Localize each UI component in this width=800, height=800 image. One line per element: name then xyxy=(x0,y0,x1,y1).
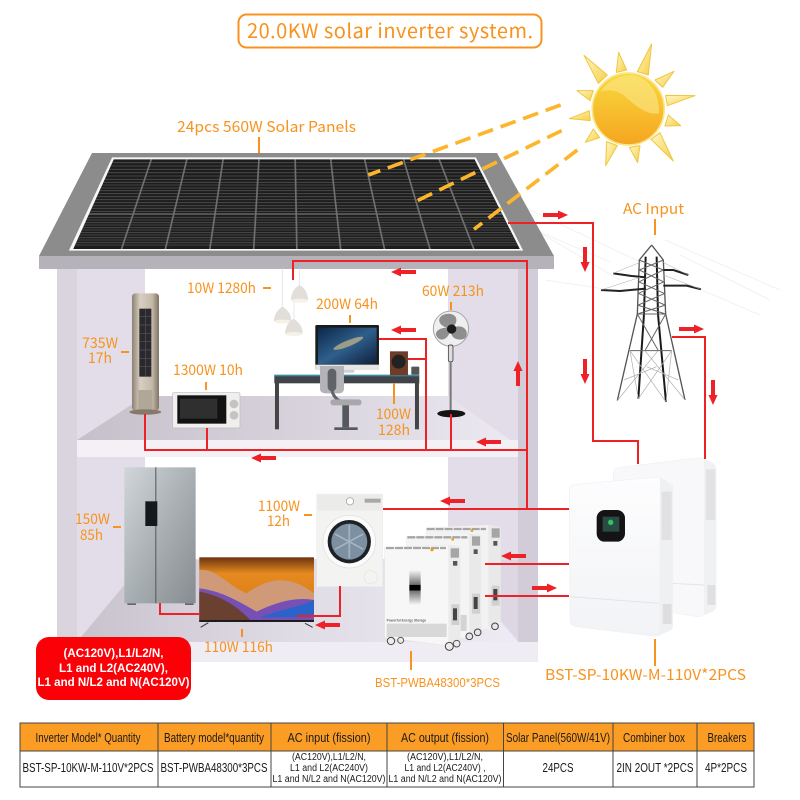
table header: Breakers xyxy=(708,731,746,745)
lower floor xyxy=(57,560,538,662)
table header: Inverter Model* Quantity xyxy=(36,731,141,745)
icon: transmission tower xyxy=(601,245,701,402)
icon: microwave xyxy=(173,393,240,428)
inverter display xyxy=(597,510,625,542)
table header: Solar Panel(560W/41V) xyxy=(506,731,610,745)
icon: air conditioner xyxy=(129,293,161,415)
table row: 4P*2PCS xyxy=(705,761,747,775)
upper floor xyxy=(77,396,518,465)
icon: desk, monitor, chair and speaker xyxy=(274,325,419,430)
icon: battery stack xyxy=(385,525,501,650)
label: inverter model: BST-SP-10KW-M-110V*2PCS xyxy=(545,664,746,685)
rear inverter xyxy=(613,458,716,617)
label: AC input xyxy=(623,198,684,235)
sun rays dashed xyxy=(368,105,577,229)
table header xyxy=(36,731,746,745)
speaker xyxy=(390,351,419,375)
callout: AC output modes xyxy=(36,637,191,700)
callout: AC output modes: L1 and L2(AC240V), xyxy=(59,663,168,675)
icon: television xyxy=(199,557,314,627)
table row xyxy=(22,752,747,785)
callout: AC output modes: (AC120V),L1/L2/N, xyxy=(64,648,164,660)
house walls xyxy=(57,269,538,662)
table row: 2IN 2OUT *2PCS xyxy=(616,761,694,775)
middle battery xyxy=(406,534,481,640)
table header: AC input (fission) xyxy=(288,731,370,745)
title: 20.0KW solar inverter system. xyxy=(247,15,533,44)
table row: 24PCS xyxy=(542,761,574,775)
load labels: 60W 213h xyxy=(422,280,484,301)
icon: pendant lamps xyxy=(274,268,308,336)
load labels: 12h xyxy=(267,510,290,531)
icon: standing fan xyxy=(433,311,469,417)
table row: L1 and N/L2 and N(AC120V) xyxy=(388,774,502,785)
load labels: 150W xyxy=(75,508,110,529)
chair xyxy=(320,366,362,430)
label: solar panels: 24pcs 560W Solar Panels xyxy=(177,116,356,137)
table row: L1 and L2(AC240V) , xyxy=(404,763,486,774)
load labels: 735W xyxy=(82,332,118,353)
front battery: Powerful Energy Storage xyxy=(387,619,426,623)
roof with solar panel xyxy=(30,153,560,269)
red wiring xyxy=(145,223,705,616)
load labels: 100W xyxy=(376,403,411,424)
table row: BST-PWBA48300*3PCS xyxy=(160,761,268,775)
load labels xyxy=(75,277,484,657)
callout: AC output modes: L1 and N/L2 and N(AC120V) xyxy=(38,677,190,689)
icon: washing machine xyxy=(317,494,383,587)
table row: BST-SP-10KW-M-110V*2PCS xyxy=(22,761,154,775)
load labels: 85h xyxy=(80,524,103,545)
table header: Combiner box xyxy=(623,731,686,745)
table row: L1 and N/L2 and N(AC120V) xyxy=(272,774,386,785)
rear battery xyxy=(426,525,501,630)
desk xyxy=(274,375,419,429)
table row: (AC120V),L1/L2/N, xyxy=(292,752,366,763)
table header: AC output (fission) xyxy=(401,731,489,745)
table row: (AC120V),L1/L2/N, xyxy=(407,752,483,763)
load labels: 1300W 10h xyxy=(173,359,243,380)
leader ticks xyxy=(113,287,656,670)
load labels: 17h xyxy=(88,347,112,368)
power lines behind tower xyxy=(510,205,780,315)
load labels: 110W 116h xyxy=(204,636,273,657)
monitor xyxy=(315,325,379,373)
load labels: 1100W xyxy=(258,495,300,516)
table header: Battery model*quantity xyxy=(164,731,265,745)
load labels: 200W 64h xyxy=(316,293,378,314)
sun xyxy=(569,44,695,166)
solar panel xyxy=(69,157,524,251)
front inverter xyxy=(569,477,673,636)
label: battery model: BST-PWBA48300*3PCS xyxy=(375,675,500,690)
load labels: 10W 1280h xyxy=(187,277,256,298)
specification table xyxy=(20,723,754,787)
icon: refrigerator xyxy=(124,467,196,605)
label: AC input: AC Input xyxy=(623,198,684,219)
table row: L1 and L2(AC240V) xyxy=(290,763,368,774)
flow arrows xyxy=(251,210,718,630)
icon: inverters xyxy=(569,458,716,636)
load labels: 128h xyxy=(378,419,410,440)
